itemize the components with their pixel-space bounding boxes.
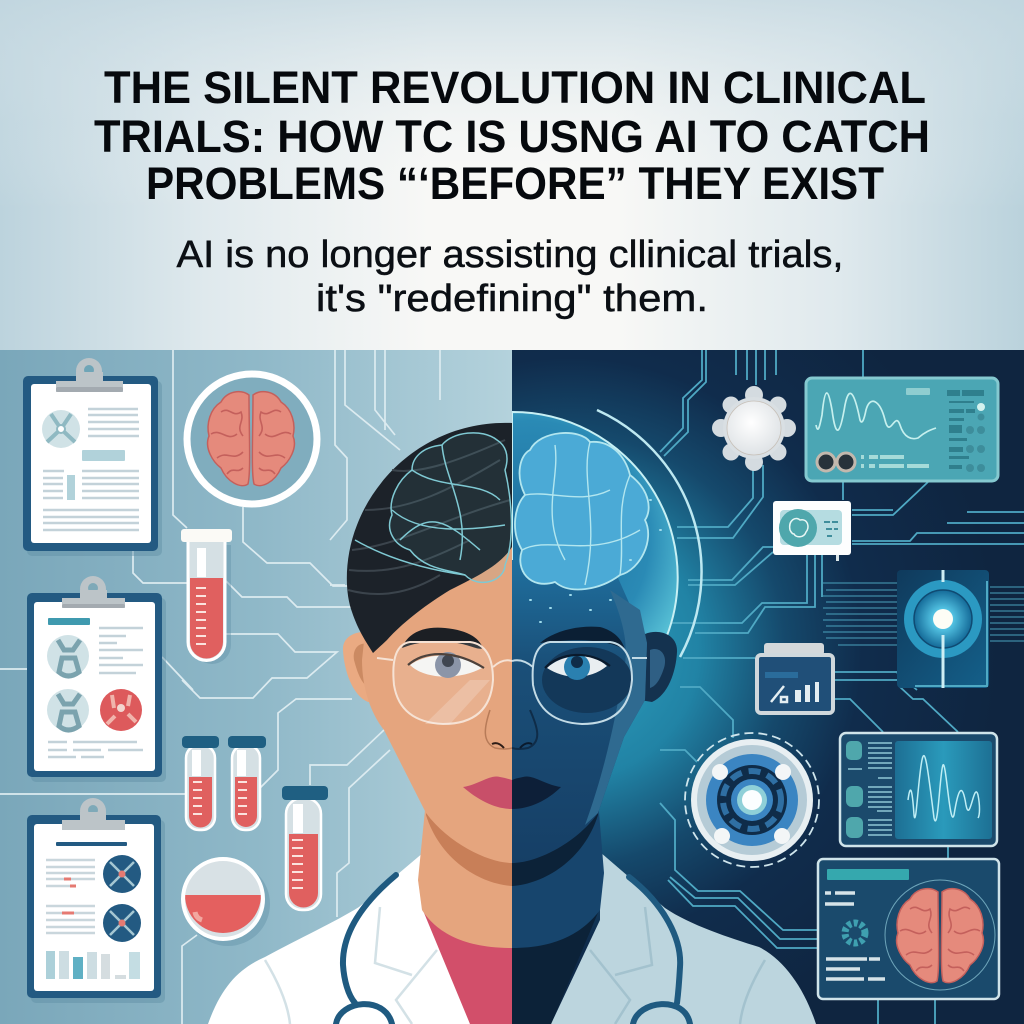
right lab coat [551, 852, 816, 1024]
panel: glowing lens [897, 570, 989, 688]
icon: tech dial [685, 733, 819, 867]
title [94, 62, 930, 209]
icon: round flask [182, 858, 270, 946]
left circuit lines [0, 350, 440, 1024]
right lips [512, 776, 561, 809]
right brow [540, 627, 625, 650]
icon: test tube pair [182, 736, 266, 830]
right outer arc [597, 410, 702, 657]
monitor: blue signal [840, 733, 997, 846]
right nostril [520, 743, 532, 748]
right eye [545, 654, 610, 680]
right brain [515, 433, 649, 589]
left hair strands [348, 440, 510, 594]
title: TRIALS: HOW TC IS USNG AI TO CATCH [94, 111, 930, 162]
right glow dome [512, 412, 678, 657]
subtitle: it's "redefining" them. [316, 278, 708, 320]
right eye shadow [542, 647, 632, 713]
icon: single tube [282, 786, 328, 910]
left glasses [377, 642, 512, 724]
left lab coat [208, 852, 470, 1024]
doctor: left half [208, 423, 512, 1024]
monitor: brain scan [818, 859, 999, 999]
right ear [644, 632, 677, 702]
right nose [512, 710, 537, 749]
icon: small card [773, 501, 851, 561]
subtitle: AI is no longer assisting cllinical trials, [176, 234, 844, 276]
left neck [418, 800, 512, 948]
clipboard: middle [27, 576, 166, 782]
title: THE SILENT REVOLUTION IN CLINICAL [104, 62, 926, 113]
left brain outline [355, 433, 511, 582]
right coat lapel line [590, 907, 765, 1024]
left nose [485, 710, 512, 749]
right glasses [512, 642, 647, 724]
icon: brain circle [187, 374, 317, 504]
left panel background [0, 350, 512, 1024]
doctor: right half [512, 410, 816, 1024]
left hair [347, 423, 512, 653]
icon: gear sphere [712, 386, 796, 471]
right shirt [512, 908, 600, 1024]
left eye [408, 652, 484, 678]
right sparkle dots [530, 500, 661, 622]
clipboard: bottom [27, 798, 165, 1003]
header background [0, 0, 1024, 350]
left brow [402, 628, 483, 649]
left nostril [492, 743, 504, 748]
monitor: waveform [806, 378, 998, 481]
left neck shadow [426, 813, 512, 886]
right face [512, 560, 647, 863]
clipboard: top [23, 358, 162, 556]
title: PROBLEMS “‘BEFORE” THEY EXIST [146, 158, 884, 209]
right panel background [512, 350, 1024, 1024]
right neck [512, 800, 604, 948]
left shirt [422, 908, 512, 1024]
left ear [343, 632, 369, 702]
icon: large test tube [181, 529, 232, 664]
left coat lapel line [265, 907, 437, 1024]
stethoscope [336, 875, 690, 1024]
right cheek highlight [585, 590, 647, 825]
subtitle [176, 234, 844, 320]
right circuit lines [660, 350, 1024, 1024]
right neck shadow [512, 813, 598, 886]
left face [362, 530, 512, 863]
icon: chart jar [757, 643, 833, 713]
left lips [463, 776, 512, 809]
